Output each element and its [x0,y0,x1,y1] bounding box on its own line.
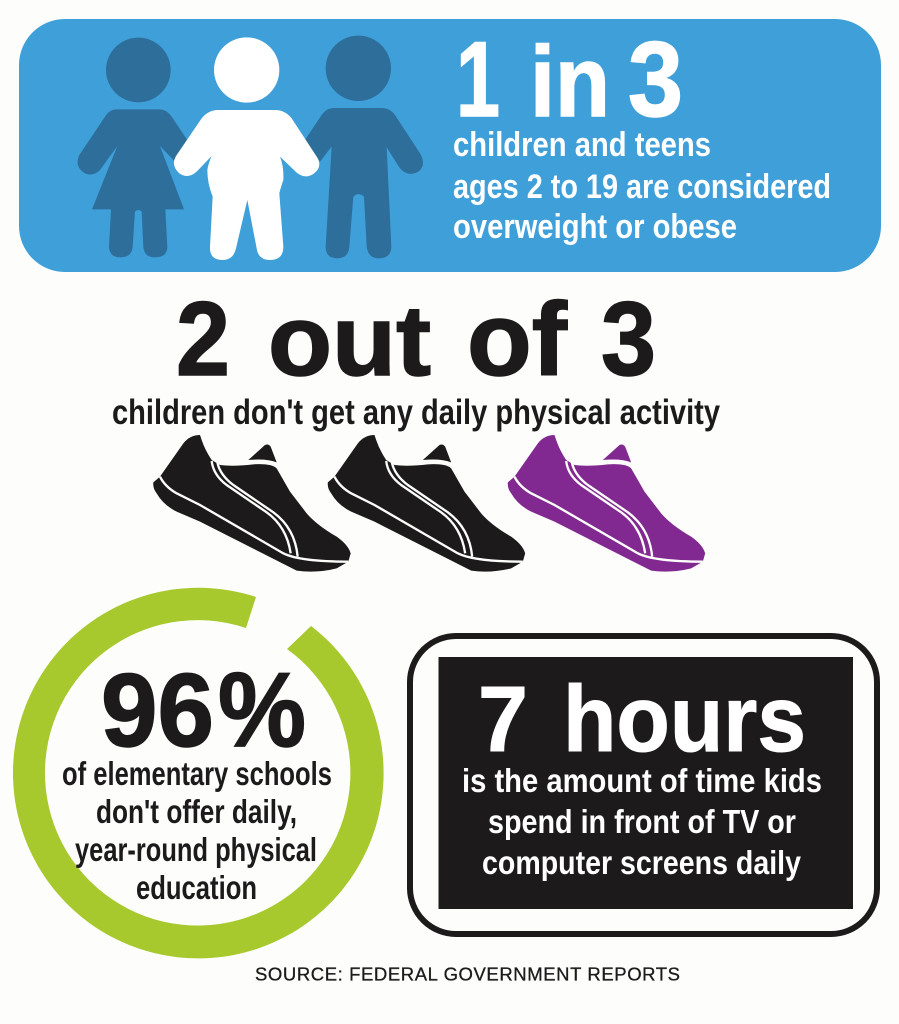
heading: 1 in 3: 3 [628,19,683,139]
text: screen time description: spend in front of TV or [488,803,796,840]
heading: 1 in 3: in [530,26,610,138]
text: elementary schools description: don't offer daily, [96,793,297,830]
heading: 96% [101,651,306,769]
panel: 2 out of 3 children [112,281,720,572]
outline frame [410,636,877,934]
text: children and teens description [453,126,831,246]
panel: 1 in 3 children [19,19,881,272]
panel: 7 hours of screen time [410,636,877,934]
chart: green ring [13,588,384,958]
text: screen time description [462,762,822,881]
text: elementary schools description: education [136,869,257,906]
icon: three children [78,36,423,260]
heading: 2 out of 3: out [268,285,431,397]
text: children and teens description: ages 2 to 19 are considered [453,168,831,206]
source line: SOURCE: FEDERAL GOVERNMENT REPORTS [255,964,680,984]
text: physical activity description: children don't get any daily physical activity [112,393,720,432]
heading: 2 out of 3 [176,281,656,398]
icon: black shoe 1 [153,435,351,572]
heading: 2 out of 3: 2 [176,281,230,398]
text: elementary schools description: year-round physical [75,831,317,868]
text: screen time description: is the amount of time kids [462,762,822,799]
icon: black shoe 2 [328,435,525,572]
heading: 2 out of 3: of [467,282,567,398]
heading: 2 out of 3: 3 [601,281,656,398]
heading: 96%: 96 [101,653,214,769]
text: children and teens description: children and teens [453,126,711,164]
text: screen time description: computer screens daily [482,844,802,881]
text: elementary schools description [62,755,332,906]
panel: 96% of schools [13,588,384,958]
icon: purple shoe [508,435,705,572]
heading: 7 hours: 7 [478,667,528,771]
heading: 96%: % [218,651,306,769]
heading: 1 in 3: 1 [456,19,500,139]
heading: 1 in 3 [456,19,683,139]
text: children and teens description: overweight or obese [453,208,737,246]
black box [438,657,853,909]
heading: 7 hours: hours [563,666,806,771]
text: elementary schools description: of elementary schools [62,755,332,792]
